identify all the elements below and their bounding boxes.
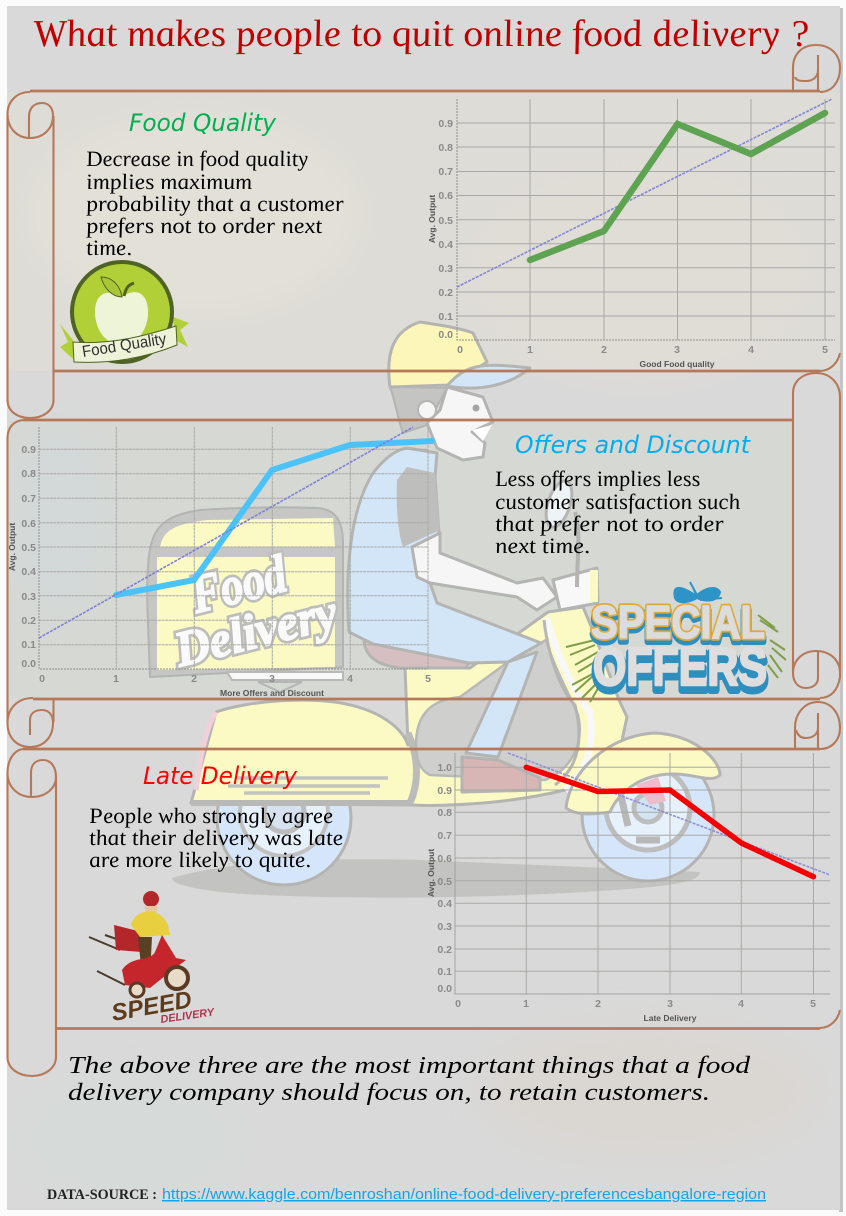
- axis titles 3: Avg. Output: [426, 849, 436, 897]
- data source: https://www.kaggle.com/benroshan/online-food-delivery-preferencesbangalore-region: [162, 1186, 766, 1203]
- rider shin and shoe: [462, 652, 540, 792]
- rider torso and thigh: [348, 448, 541, 663]
- axis titles 2: Avg. Output: [7, 523, 17, 571]
- rider head: [389, 322, 530, 460]
- trend line 1: [457, 99, 832, 287]
- y axis labels 2: 0.3: [21, 591, 36, 603]
- text: late delivery description: [86, 803, 345, 872]
- seat: [364, 640, 470, 668]
- handlebar and mirror: [541, 478, 598, 610]
- text: offers description: Less offers implies less: [492, 466, 702, 491]
- y axis labels 1: 0.9: [438, 118, 453, 130]
- y axis labels 3: 0.7: [437, 830, 452, 842]
- x axis labels 3: 0: [455, 998, 461, 1010]
- palm leaves: [566, 615, 786, 702]
- text: food quality description: time.: [84, 235, 134, 260]
- title: What makes people to quit online food delivery ?: [30, 13, 812, 55]
- y axis labels 2: 0.6: [21, 518, 36, 530]
- text: late delivery description: are more likely to quite.: [87, 847, 313, 872]
- y axis labels 1: 0.4: [438, 239, 453, 251]
- y axis labels 1: 0.5: [438, 215, 453, 227]
- y axis labels 2: 0.4: [21, 566, 36, 578]
- box label: Food: [184, 543, 293, 625]
- y axis labels 3: 0.3: [437, 921, 452, 933]
- y axis labels 1: 0.6: [438, 190, 453, 202]
- front fender: [566, 733, 720, 814]
- text: food quality description: Decrease in food quality: [83, 146, 310, 171]
- x axis labels 1: 1: [527, 344, 533, 356]
- bow: [674, 582, 722, 602]
- y axis labels 3: 0.4: [437, 898, 452, 910]
- icon: speed delivery logo: DELIVERY: [160, 1006, 217, 1026]
- axis titles 1: Good Food quality: [639, 359, 715, 369]
- text: offers description: customer satisfaction such: [493, 489, 742, 514]
- y axis labels 3: 0.6: [437, 853, 452, 865]
- text: food quality description: [82, 146, 346, 260]
- trend line 2: [39, 427, 413, 638]
- delivery box: [147, 507, 343, 678]
- scroll frame: late delivery: [8, 702, 840, 1076]
- y axis labels 2: 0.8: [21, 468, 36, 480]
- trend line 3: [508, 753, 830, 875]
- x axis labels 2: 2: [191, 673, 197, 685]
- scroll frame: food quality: [8, 45, 840, 418]
- y axis labels 2: 0.2: [21, 615, 36, 627]
- y axis labels 3: 0.9: [437, 785, 452, 797]
- y axis labels 2: 0.7: [21, 493, 36, 505]
- text: offers description: that prefer not to order: [493, 511, 726, 536]
- x axis labels 3: 1: [523, 998, 529, 1010]
- x axis labels 3: 4: [738, 998, 744, 1010]
- chart: more offers and discount: [7, 427, 432, 698]
- y axis labels 3: 0.2: [437, 944, 452, 956]
- icon: special offers logo: SPECIAL: [591, 600, 765, 652]
- y axis labels 3: 0.5: [437, 876, 452, 888]
- scroll frame: offers and discount: [8, 373, 840, 747]
- x axis labels 2: 1: [113, 673, 119, 685]
- x axis labels 1: [457, 344, 828, 356]
- y axis labels 3: [437, 762, 452, 995]
- box label: Delivery: [168, 583, 343, 678]
- text: offers description: next time.: [493, 533, 592, 558]
- x axis labels 3: 3: [667, 998, 673, 1010]
- text: conclusion: [68, 1053, 751, 1106]
- data source: DATA-SOURCE :: [47, 1187, 157, 1203]
- x axis labels 3: 5: [810, 998, 816, 1010]
- data line 3: [526, 767, 814, 877]
- text: late delivery description: that their delivery was late: [87, 825, 345, 850]
- y axis labels 3: 1.0: [437, 762, 452, 774]
- illustration: delivery rider on scooter: [147, 322, 720, 898]
- scooter body: [191, 607, 720, 814]
- box label: [155, 533, 343, 678]
- front wheel: [582, 749, 714, 881]
- text: food quality description: probability that a customer: [82, 191, 346, 216]
- heading: food quality: Food Quality: [129, 109, 277, 137]
- icon: special offers logo: SPECIAL: [591, 596, 765, 648]
- x axis labels 2: 4: [347, 673, 353, 685]
- y axis labels 2: 0.5: [21, 542, 36, 554]
- grey scooter interior: [416, 640, 580, 780]
- x axis labels 3: [455, 998, 816, 1010]
- y axis labels 1: 0.2: [438, 287, 453, 299]
- data line 2: [116, 441, 432, 595]
- heading: late delivery: Late Delivery: [143, 762, 298, 790]
- x axis labels 3: 2: [595, 998, 601, 1010]
- icon: special offers logo: SPECIAL: [591, 596, 765, 648]
- rear wheel: [217, 751, 351, 885]
- axis titles 1: [427, 195, 715, 369]
- x axis labels 2: 5: [425, 673, 431, 685]
- text: conclusion: The above three are the most important things that a food: [68, 1053, 751, 1079]
- icon: special offers logo: OFFERS: [593, 637, 767, 697]
- rider sleeve: [397, 467, 440, 547]
- x axis labels 2: [39, 673, 431, 685]
- data line 1: [530, 113, 825, 260]
- y axis labels 2: 0.9: [21, 444, 36, 456]
- rider arm: [412, 533, 557, 610]
- text: conclusion: delivery company should focus on, to retain customers.: [68, 1080, 710, 1106]
- y axis labels 3: 0.1: [437, 966, 452, 978]
- y axis labels 1: 0.1: [438, 311, 453, 323]
- x axis labels 1: 0: [457, 344, 463, 356]
- x axis labels 1: 4: [748, 344, 754, 356]
- y axis labels 3: 0.0: [437, 983, 452, 995]
- y axis labels 2: 0.1: [21, 639, 36, 651]
- box label: Food: [184, 543, 293, 625]
- gridlines 2: [39, 427, 428, 669]
- axis titles 3: Late Delivery: [644, 1013, 697, 1023]
- chart: late delivery: [426, 753, 830, 1023]
- box label: Delivery: [168, 583, 343, 678]
- x axis labels 1: 2: [601, 344, 607, 356]
- text: late delivery description: People who strongly agree: [86, 803, 335, 828]
- ground shadow: [172, 859, 700, 898]
- heading: offers and discount: Offers and Discount: [515, 431, 752, 459]
- axis titles 1: Avg. Output: [427, 195, 437, 243]
- icon: food quality badge: Food Quality: [81, 331, 168, 361]
- x axis labels 2: 0: [39, 673, 45, 685]
- y axis labels 1: 0.8: [438, 142, 453, 154]
- icon: special offers logo: [566, 582, 786, 702]
- y axis labels 1: 0.3: [438, 263, 453, 275]
- icon: speed delivery logo: SPEED: [109, 986, 194, 1027]
- text: food quality description: prefers not to order next: [82, 213, 325, 238]
- icon: speed delivery logo: [89, 891, 217, 1027]
- gridlines 1: [457, 99, 835, 340]
- y axis labels 1: 0.0: [438, 329, 453, 341]
- x axis labels 2: 3: [269, 673, 275, 685]
- gridlines 3: [455, 753, 830, 994]
- y axis labels 1: 0.7: [438, 166, 453, 178]
- x axis labels 1: 3: [674, 344, 680, 356]
- chart: good food quality: [427, 99, 835, 369]
- text: offers description: [492, 466, 742, 558]
- icon: food quality badge: [60, 262, 189, 362]
- y axis labels 1: [438, 118, 453, 341]
- x axis labels 1: 5: [822, 344, 828, 356]
- text: food quality description: implies maximum: [84, 169, 254, 194]
- y axis labels 3: 0.8: [437, 807, 452, 819]
- axis titles 3: [426, 849, 697, 1023]
- axis titles 2: [7, 523, 324, 698]
- axis titles 2: More Offers and Discount: [220, 688, 324, 698]
- y axis labels 2: [21, 444, 36, 670]
- cap: [389, 322, 487, 387]
- icon: special offers logo: OFFERS: [593, 642, 767, 702]
- y axis labels 2: 0.0: [21, 658, 36, 670]
